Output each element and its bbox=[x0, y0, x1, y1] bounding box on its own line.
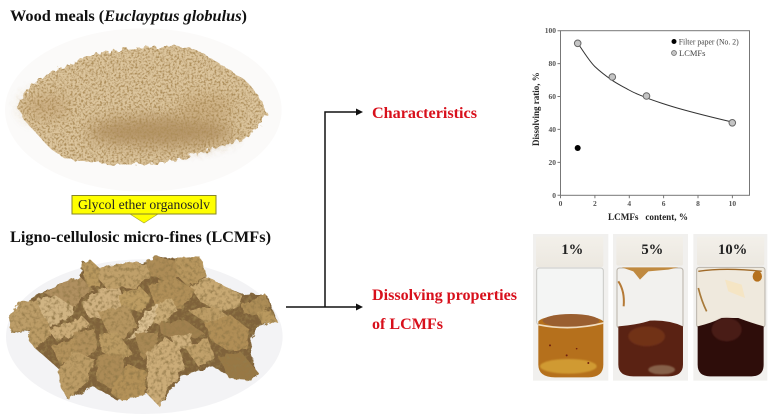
x axis tick labels bbox=[559, 199, 736, 208]
vial 5 percent bbox=[613, 234, 688, 381]
y axis tick labels: 100 bbox=[545, 26, 556, 35]
x axis tick labels: 0 bbox=[559, 199, 563, 208]
x axis tick labels: 6 bbox=[662, 199, 666, 208]
y axis title: Dissolving ratio, % bbox=[531, 72, 541, 146]
title: wood meals: Wood meals (Euclayptus globulus) bbox=[10, 8, 247, 25]
process label: glycol ether organosolv bbox=[72, 196, 216, 223]
arrow: connector to characteristics and dissolving properties bbox=[286, 108, 363, 310]
vial 1 percent: 1% bbox=[561, 242, 583, 258]
heading: dissolving properties of LCMFs: of LCMFs bbox=[372, 316, 443, 333]
legend: LCMFs bbox=[679, 48, 705, 58]
plot frame and ticks bbox=[558, 31, 750, 198]
heading: characteristics: Characteristics bbox=[372, 105, 477, 122]
legend: Filter paper (No. 2) bbox=[679, 36, 739, 46]
y axis tick labels: 20 bbox=[548, 158, 556, 167]
vial 5 percent: 5% bbox=[641, 242, 663, 258]
y axis tick labels: 80 bbox=[548, 59, 556, 68]
fitted curve bbox=[578, 43, 732, 122]
process label: glycol ether organosolv: Glycol ether organosolv bbox=[78, 197, 210, 212]
y axis tick labels: 60 bbox=[548, 92, 556, 101]
y axis tick labels: 0 bbox=[552, 191, 556, 200]
photo: vials bbox=[533, 234, 767, 381]
y axis tick labels bbox=[545, 26, 556, 200]
filter paper data point bbox=[575, 145, 581, 151]
LCMFs data points bbox=[574, 40, 736, 126]
heading: dissolving properties of LCMFs bbox=[372, 287, 517, 333]
x axis tick labels: 10 bbox=[729, 199, 736, 208]
y axis tick labels: 40 bbox=[548, 125, 556, 134]
x axis tick labels: 2 bbox=[593, 199, 597, 208]
chart: dissolving ratio vs LCMFs content bbox=[531, 26, 750, 222]
legend bbox=[672, 36, 739, 58]
x axis title: LCMFs content, % bbox=[608, 212, 688, 222]
photo: wood meal pile bbox=[5, 28, 282, 192]
title: LCMFs: Ligno-cellulosic micro-fines (LCMFs) bbox=[10, 229, 271, 246]
photo: LCMF chunks bbox=[6, 256, 283, 414]
heading: dissolving properties of LCMFs: Dissolving properties bbox=[372, 287, 517, 304]
x axis tick labels: 8 bbox=[696, 199, 700, 208]
vial 1 percent bbox=[533, 234, 608, 381]
x axis tick labels: 4 bbox=[627, 199, 631, 208]
vial 10 percent: 10% bbox=[718, 242, 747, 258]
vial 10 percent bbox=[693, 234, 767, 381]
